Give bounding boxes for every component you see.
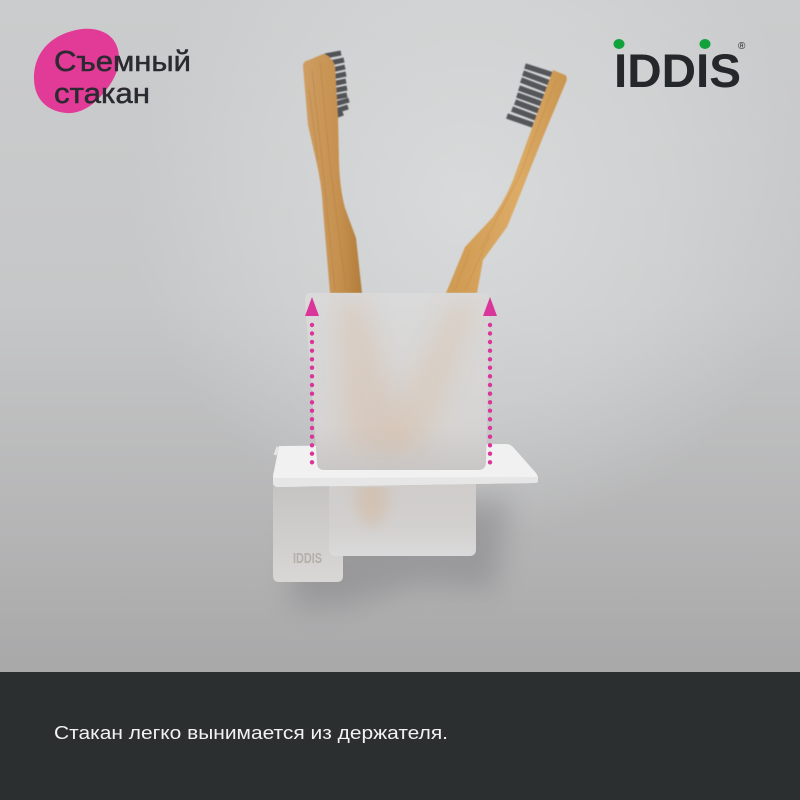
bristles xyxy=(325,53,349,116)
handle xyxy=(446,70,567,293)
arrow: left dotted xyxy=(305,297,319,464)
registered mark: ® xyxy=(738,41,746,52)
pink blob xyxy=(34,29,119,113)
logo dots xyxy=(614,39,710,49)
shadow under holder xyxy=(290,500,510,606)
handle xyxy=(303,54,362,293)
bracket logo: IDDIS xyxy=(293,551,322,567)
caption: Стакан легко вынимается из держателя. xyxy=(54,722,448,743)
lower glass seen beneath shelf xyxy=(329,484,476,556)
toothbrush: left xyxy=(303,53,362,293)
bottom band xyxy=(0,672,800,800)
arrow: right dotted xyxy=(483,297,497,464)
logo: IDDIS: IDDIS xyxy=(614,44,741,97)
handle grain xyxy=(309,62,346,290)
shelf xyxy=(273,444,538,487)
title: Съемный xyxy=(54,46,191,78)
handle grain xyxy=(455,80,556,290)
bristles xyxy=(507,66,553,125)
blurred brush inside cup xyxy=(335,300,410,450)
title xyxy=(54,46,191,110)
toothbrush: right xyxy=(446,66,567,293)
wall bracket xyxy=(273,487,343,582)
frosted glass cup xyxy=(305,293,490,470)
title: стакан xyxy=(54,78,150,110)
